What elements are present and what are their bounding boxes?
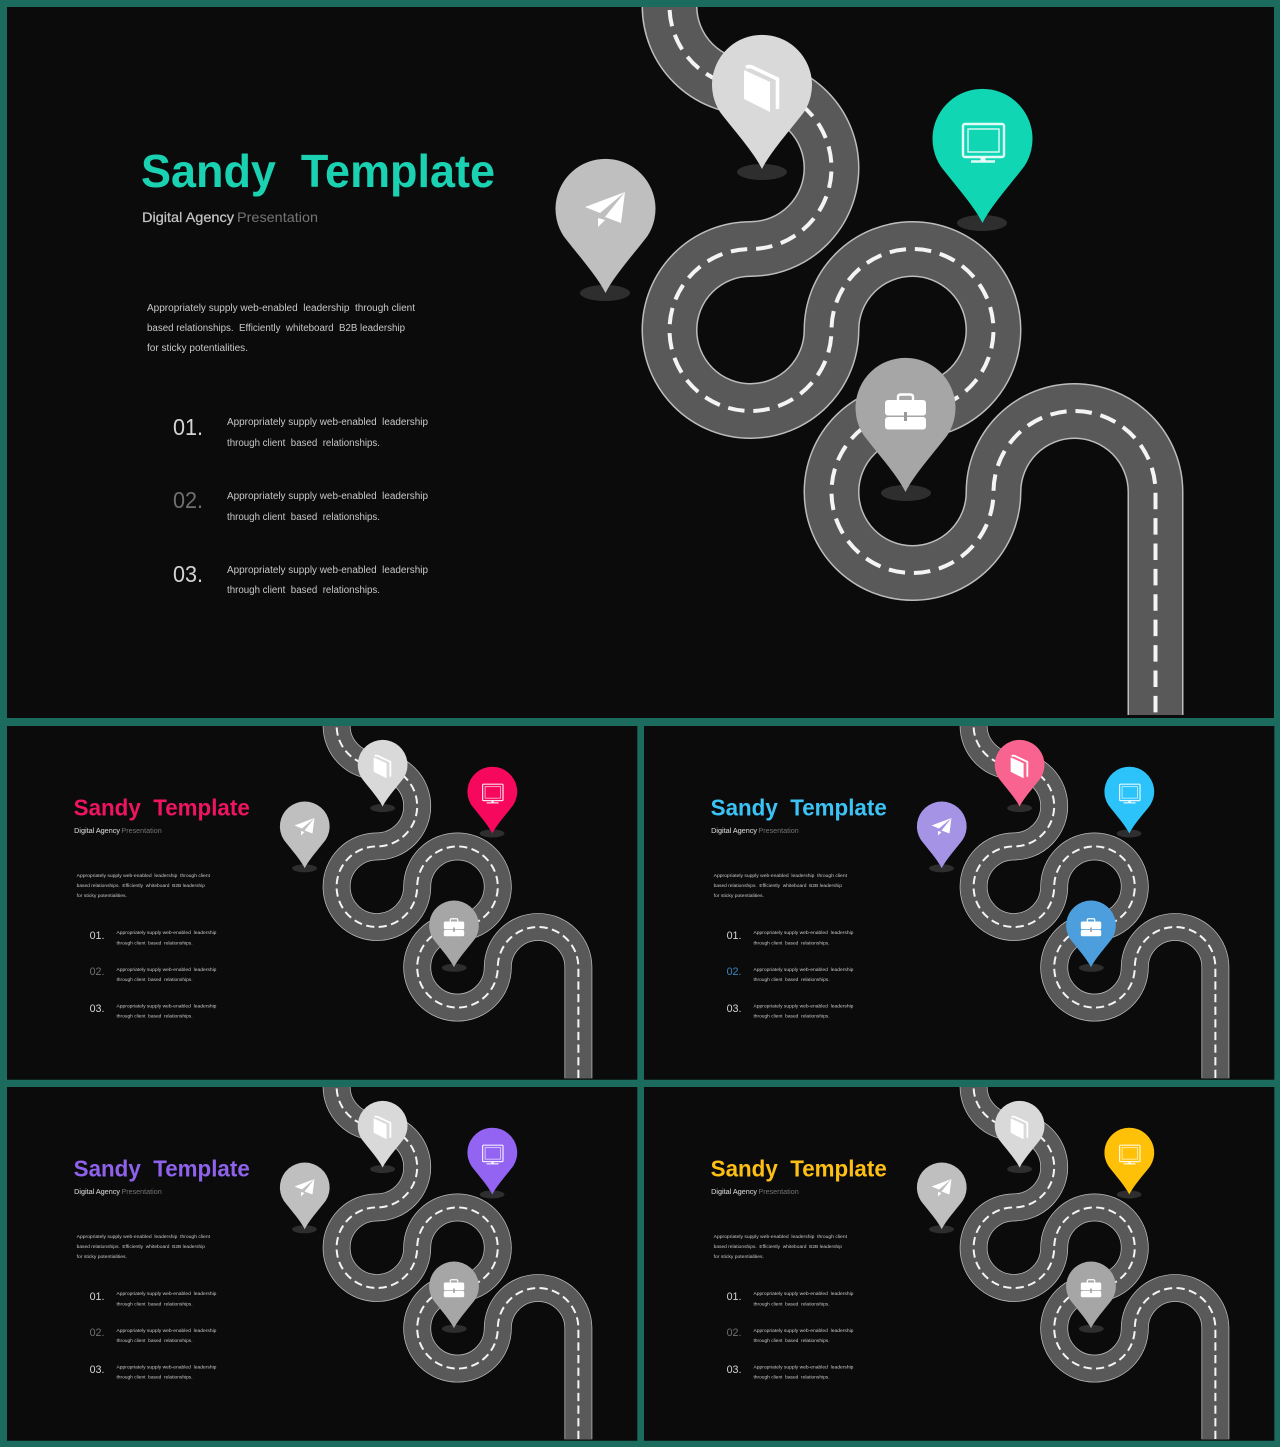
title: Sandy Template	[74, 1156, 250, 1182]
intro paragraph: based relationships. Efficiently whiteboard B2B leadership	[714, 1244, 842, 1250]
winding road	[974, 1087, 1215, 1440]
pin: book	[358, 740, 407, 812]
list item 03: through client based relationships.	[753, 1375, 830, 1381]
winding road	[337, 726, 578, 1079]
list item 03	[727, 1364, 854, 1381]
intro paragraph: based relationships. Efficiently whiteboard B2B leadership	[147, 323, 405, 334]
list item 02	[727, 966, 854, 983]
intro paragraph: for sticky potentialities.	[77, 1254, 127, 1260]
list item 01: through client based relationships.	[227, 438, 380, 449]
intro paragraph: for sticky potentialities.	[147, 343, 248, 354]
intro paragraph: based relationships. Efficiently whiteboard B2B leadership	[714, 883, 842, 889]
list item 02: through client based relationships.	[116, 1338, 193, 1344]
intro paragraph: for sticky potentialities.	[714, 1254, 764, 1260]
list item 01: Appropriately supply web-enabled leadership	[227, 417, 428, 428]
list item 02: through client based relationships.	[753, 1338, 830, 1344]
list item 02: through client based relationships.	[753, 977, 830, 983]
pin: briefcase	[1066, 901, 1116, 972]
list item 03: 03.	[727, 1364, 742, 1376]
intro paragraph	[714, 1234, 848, 1260]
list item 01: 01.	[173, 414, 203, 440]
subtitle	[142, 209, 318, 225]
pin: monitor	[467, 767, 517, 837]
subtitle: Digital Agency	[142, 209, 234, 225]
subtitle: Digital Agency	[74, 1189, 120, 1196]
list item 03: through client based relationships.	[227, 585, 380, 596]
subtitle	[74, 1189, 162, 1196]
panel: main teal slide	[7, 6, 1274, 718]
list item 01: 01.	[90, 930, 105, 942]
list item 02	[727, 1327, 854, 1344]
list item 02: Appropriately supply web-enabled leadership	[116, 967, 217, 973]
list item 01: 01.	[727, 1291, 742, 1303]
intro paragraph: Appropriately supply web-enabled leadership through client	[714, 873, 848, 879]
list item 01: through client based relationships.	[116, 1301, 193, 1307]
title: Sandy Template	[74, 795, 250, 821]
pin: paper plane	[556, 159, 656, 301]
panel: yellow slide	[644, 1087, 1274, 1441]
list item 03	[173, 561, 428, 596]
subtitle: Digital Agency	[711, 828, 757, 835]
intro paragraph: for sticky potentialities.	[77, 893, 127, 899]
intro paragraph	[77, 873, 211, 899]
winding road	[337, 1087, 578, 1440]
list item 03: 03.	[173, 561, 203, 587]
pin: briefcase	[856, 358, 956, 501]
pin: book	[712, 35, 812, 180]
list item 01: Appropriately supply web-enabled leadership	[753, 1291, 854, 1297]
winding road	[974, 726, 1215, 1079]
list item 02: 02.	[727, 966, 742, 978]
subtitle: Digital Agency	[74, 828, 120, 835]
list item 01	[727, 1291, 854, 1307]
title: Sandy Template	[711, 795, 887, 821]
pin: paper plane	[917, 802, 967, 872]
list item 02	[173, 487, 428, 523]
panel: blue slide	[644, 726, 1274, 1080]
subtitle: Presentation	[237, 209, 318, 225]
list item 01: Appropriately supply web-enabled leadership	[116, 930, 217, 936]
list item 02: 02.	[173, 487, 203, 513]
list item 01: through client based relationships.	[753, 1301, 830, 1307]
list item 03: 03.	[727, 1003, 742, 1015]
subtitle	[74, 828, 162, 835]
list item 03: Appropriately supply web-enabled leadership	[227, 565, 428, 576]
intro paragraph	[147, 303, 415, 354]
intro paragraph: Appropriately supply web-enabled leadership through client	[147, 303, 415, 314]
list item 03: Appropriately supply web-enabled leadership	[116, 1365, 217, 1371]
list item 02: Appropriately supply web-enabled leadership	[227, 491, 428, 502]
winding road	[670, 6, 1156, 716]
panel: purple slide	[7, 1087, 637, 1441]
title: Sandy Template	[141, 145, 495, 197]
list item 02: Appropriately supply web-enabled leadership	[116, 1328, 217, 1334]
list item 03: 03.	[90, 1003, 105, 1015]
list item 02	[90, 966, 217, 983]
pin: briefcase	[429, 1262, 479, 1333]
list item 01: Appropriately supply web-enabled leadership	[753, 930, 854, 936]
list item 03: through client based relationships.	[753, 1014, 830, 1020]
intro paragraph: Appropriately supply web-enabled leadership through client	[77, 1234, 211, 1240]
pin: paper plane	[280, 1163, 330, 1233]
intro paragraph: for sticky potentialities.	[714, 893, 764, 899]
list item 03	[727, 1003, 854, 1020]
subtitle	[711, 1189, 799, 1196]
intro paragraph	[77, 1234, 211, 1260]
pin: paper plane	[280, 802, 330, 872]
list item 01	[90, 1291, 217, 1307]
pin: book	[995, 740, 1044, 812]
list item 03: Appropriately supply web-enabled leadership	[116, 1004, 217, 1010]
list item 01	[727, 930, 854, 946]
list item 03: through client based relationships.	[116, 1375, 193, 1381]
list item 02	[90, 1327, 217, 1344]
pin: monitor	[1104, 1128, 1154, 1198]
subtitle: Presentation	[121, 828, 162, 835]
pin: book	[995, 1101, 1044, 1173]
list item 02: through client based relationships.	[227, 512, 380, 523]
list item 02: Appropriately supply web-enabled leadership	[753, 967, 854, 973]
intro paragraph: based relationships. Efficiently whiteboard B2B leadership	[77, 883, 205, 889]
list item 01	[90, 930, 217, 946]
list item 01: Appropriately supply web-enabled leadership	[116, 1291, 217, 1297]
list item 03: Appropriately supply web-enabled leadership	[753, 1365, 854, 1371]
subtitle	[711, 828, 799, 835]
panel: pink slide	[7, 726, 637, 1080]
intro paragraph: based relationships. Efficiently whiteboard B2B leadership	[77, 1244, 205, 1250]
pin: monitor	[467, 1128, 517, 1198]
list item 02: 02.	[90, 1327, 105, 1339]
intro paragraph: Appropriately supply web-enabled leadership through client	[77, 873, 211, 879]
pin: paper plane	[917, 1163, 967, 1233]
subtitle: Presentation	[758, 828, 799, 835]
list item 02: 02.	[90, 966, 105, 978]
list item 03: Appropriately supply web-enabled leadership	[753, 1004, 854, 1010]
list item 03: through client based relationships.	[116, 1014, 193, 1020]
list item 03: 03.	[90, 1364, 105, 1376]
pin: briefcase	[1066, 1262, 1116, 1333]
list item 03	[90, 1364, 217, 1381]
list item 02: Appropriately supply web-enabled leadership	[753, 1328, 854, 1334]
list item 03	[90, 1003, 217, 1020]
intro paragraph: Appropriately supply web-enabled leadership through client	[714, 1234, 848, 1240]
list item 01: 01.	[90, 1291, 105, 1303]
pin: briefcase	[429, 901, 479, 972]
intro paragraph	[714, 873, 848, 899]
list item 01: 01.	[727, 930, 742, 942]
subtitle: Presentation	[121, 1189, 162, 1196]
pin: book	[358, 1101, 407, 1173]
list item 01: through client based relationships.	[116, 940, 193, 946]
list item 01: through client based relationships.	[753, 940, 830, 946]
pin: monitor	[1104, 767, 1154, 837]
subtitle: Presentation	[758, 1189, 799, 1196]
list item 02: 02.	[727, 1327, 742, 1339]
list item 02: through client based relationships.	[116, 977, 193, 983]
list item 01	[173, 414, 428, 449]
title: Sandy Template	[711, 1156, 887, 1182]
pin: monitor	[932, 89, 1032, 231]
subtitle: Digital Agency	[711, 1189, 757, 1196]
